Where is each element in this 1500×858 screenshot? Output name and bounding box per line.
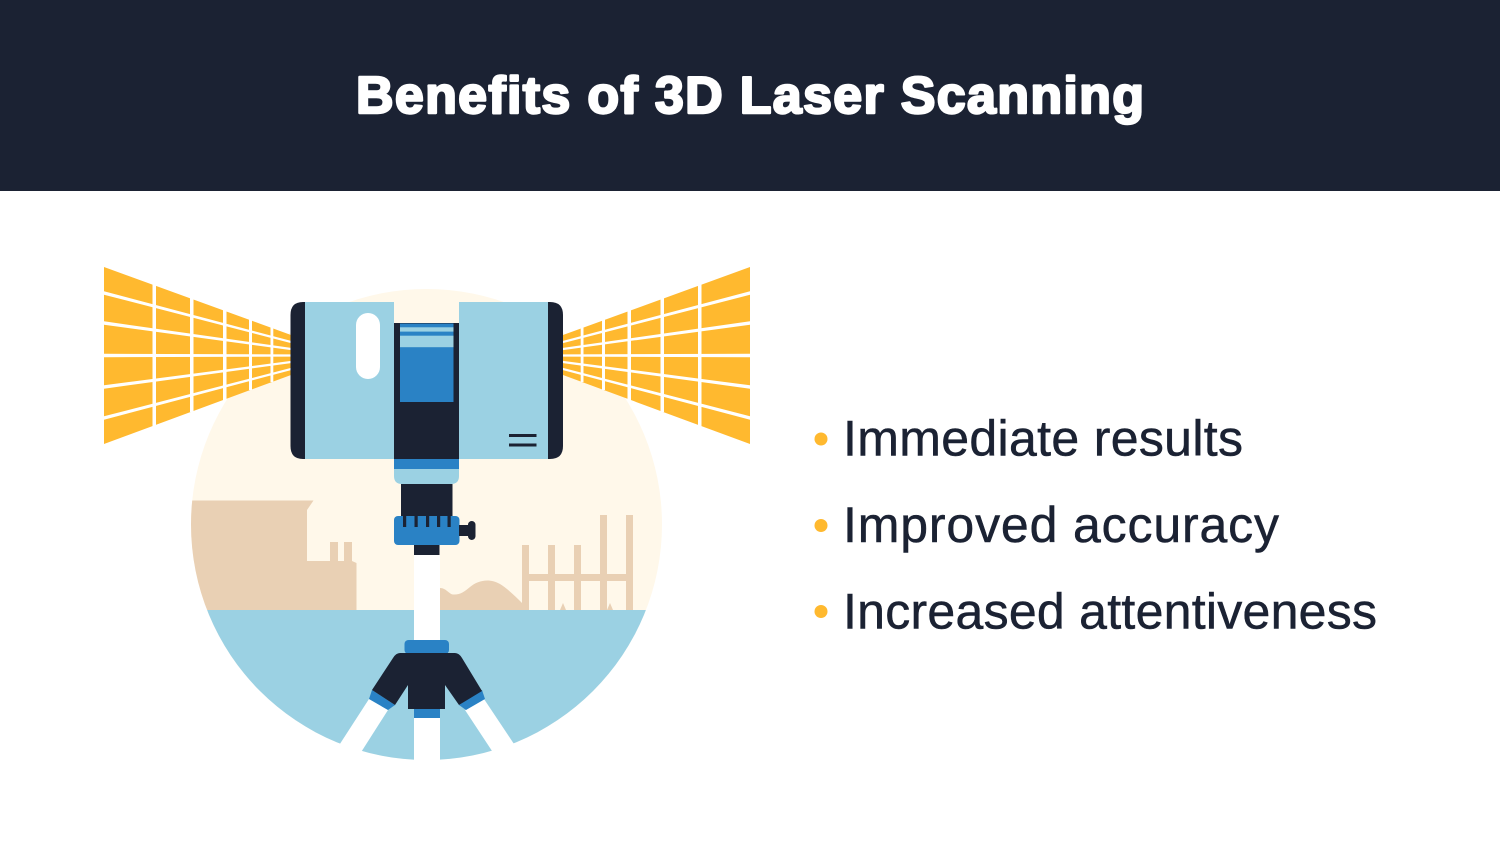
column and centre leg <box>414 555 440 766</box>
window pill <box>356 313 380 379</box>
right scan beam <box>563 267 750 444</box>
bullet: immediate results: Immediate results <box>843 410 1243 466</box>
title: Benefits of 3D Laser Scanning <box>356 67 1144 125</box>
header band <box>0 0 1500 191</box>
tripod legs <box>336 699 388 757</box>
base band <box>394 469 459 484</box>
bullet: increased attentiveness: Increased attentiveness <box>843 584 1377 640</box>
clamp <box>394 516 476 555</box>
left scan beam <box>104 267 291 444</box>
skyline: factory and towers <box>185 500 633 610</box>
ground <box>207 610 646 760</box>
bullet: improved accuracy: Improved accuracy <box>843 497 1279 553</box>
illustration: laser scanner scene <box>104 267 750 766</box>
vent lines <box>509 434 536 437</box>
tripod <box>336 640 518 757</box>
scanner window <box>400 324 454 402</box>
neck <box>401 484 452 518</box>
background circle <box>191 289 662 760</box>
benefits list <box>814 410 1377 640</box>
scanner head <box>290 302 563 484</box>
